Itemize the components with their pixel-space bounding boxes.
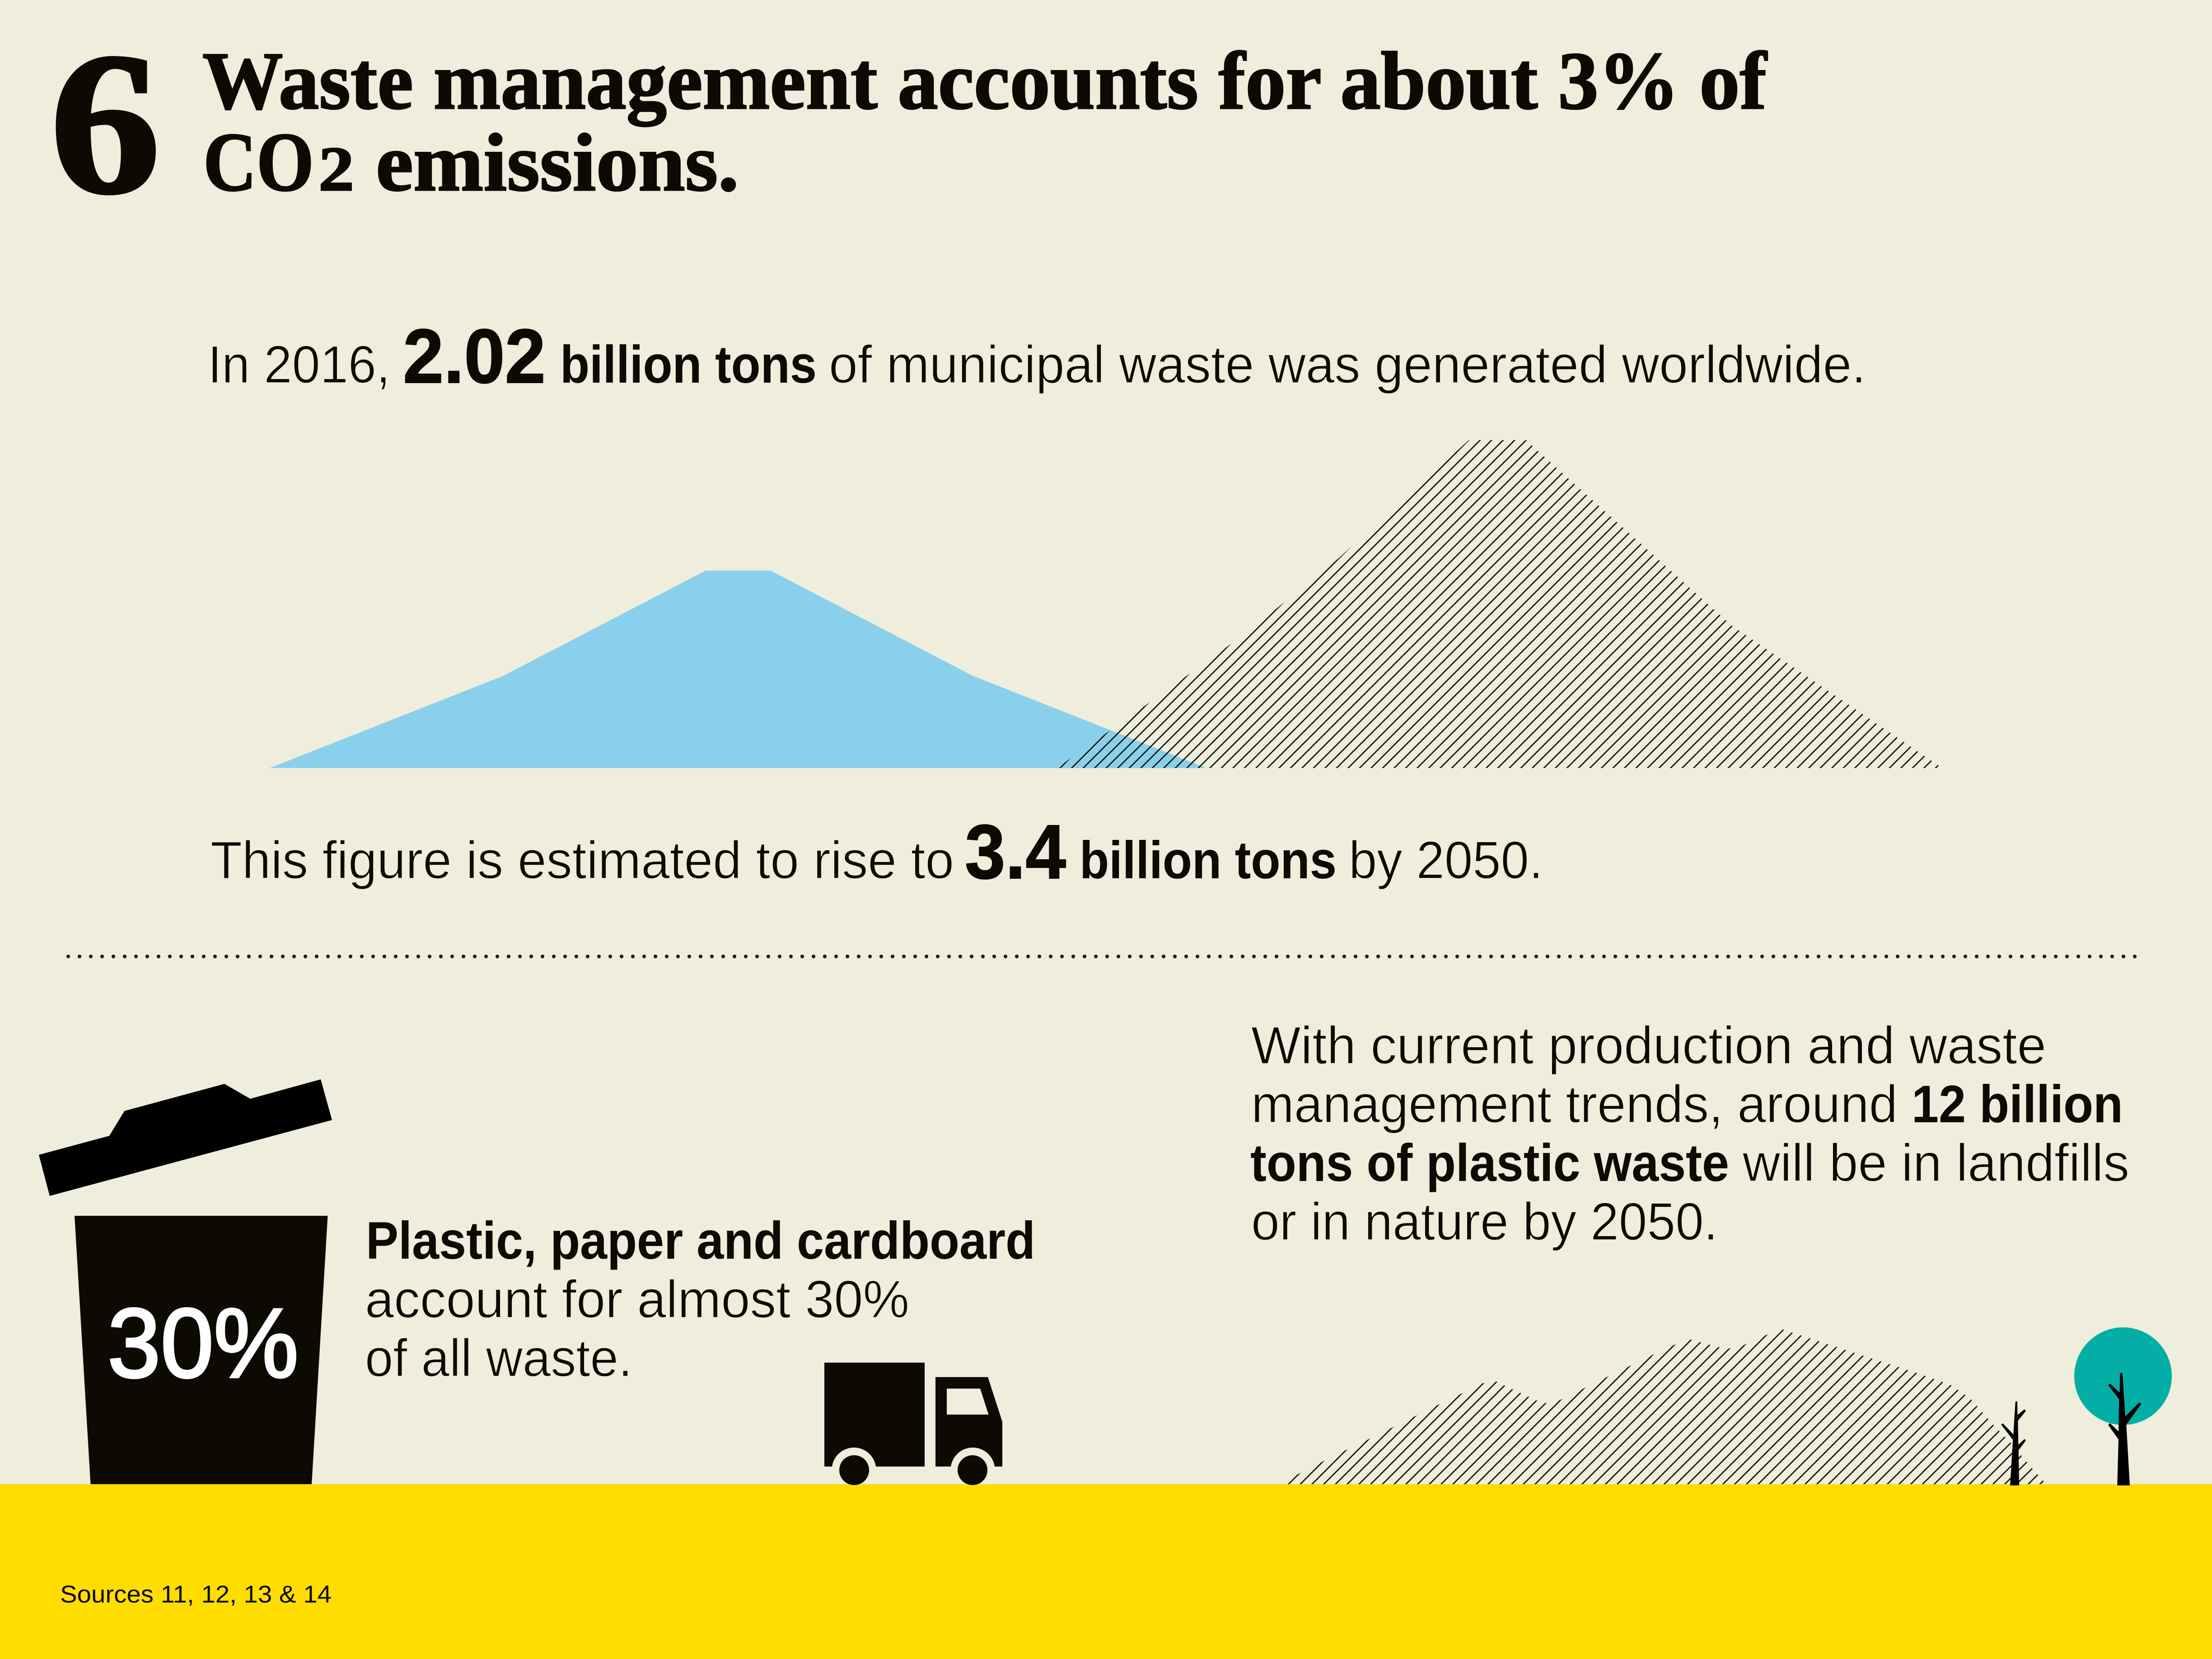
text: plastic waste forecast: will be in landfills [1742, 1133, 2129, 1192]
icon: bare tree [2001, 1401, 2026, 1486]
title: 2 [318, 134, 354, 204]
text: 2050 waste figure: 3.4 [965, 809, 1066, 895]
text: plastic waste forecast: management trends, around [1251, 1074, 1898, 1134]
text: plastic, paper and cardboard: account for almost 30% [365, 1270, 909, 1329]
icon: trash bin with 30%: 30% [108, 1289, 299, 1398]
title: CO [203, 116, 314, 209]
text: 2050 waste figure: This figure is estimated to rise to [210, 830, 954, 890]
icon: truck [824, 1363, 1002, 1485]
text: 2050 waste figure: billion tons [1080, 830, 1337, 890]
text: 2050 waste figure: by 2050. [1349, 830, 1543, 890]
ground [0, 1484, 2212, 1659]
icon: trash bin with 30% [75, 1216, 328, 1484]
text: plastic waste forecast: tons of plastic waste [1250, 1133, 1729, 1192]
chart: hatched mountain 2050 [1351, 465, 1802, 917]
text: plastic, paper and cardboard [365, 1211, 1035, 1387]
title [202, 36, 1768, 209]
text: plastic waste forecast: or in nature by 2050. [1251, 1192, 1718, 1251]
text: 2016 waste figure: billion tons [560, 335, 817, 394]
text: 2050 waste figure [210, 809, 1543, 895]
chart: hatched landfill mound [1287, 1329, 2044, 1484]
text: 2016 waste figure: In 2016, [208, 335, 390, 394]
text: 2016 waste figure [208, 314, 1866, 399]
text: plastic waste forecast [1250, 1016, 2129, 1251]
title: emissions. [376, 117, 739, 208]
sources: Sources 11, 12, 13 & 14 [60, 1581, 332, 1608]
text: 2016 waste figure: 2.02 [403, 314, 546, 399]
text: plastic, paper and cardboard: of all waste. [365, 1328, 632, 1387]
icon: trash bin lid [39, 1079, 332, 1196]
text: plastic, paper and cardboard: Plastic, paper and cardboard [366, 1211, 1035, 1270]
text: plastic waste forecast: 12 billion [1912, 1074, 2123, 1134]
text: 2016 waste figure: of municipal waste was generated worldwide. [829, 335, 1866, 394]
chart: blue mountain 2016 [270, 571, 1207, 768]
title: Waste management accounts for about 3% of [202, 36, 1768, 127]
icon: green tree [2074, 1327, 2172, 1486]
big number 6: 6 [50, 11, 161, 236]
text: plastic waste forecast: With current production and waste [1251, 1016, 2046, 1075]
